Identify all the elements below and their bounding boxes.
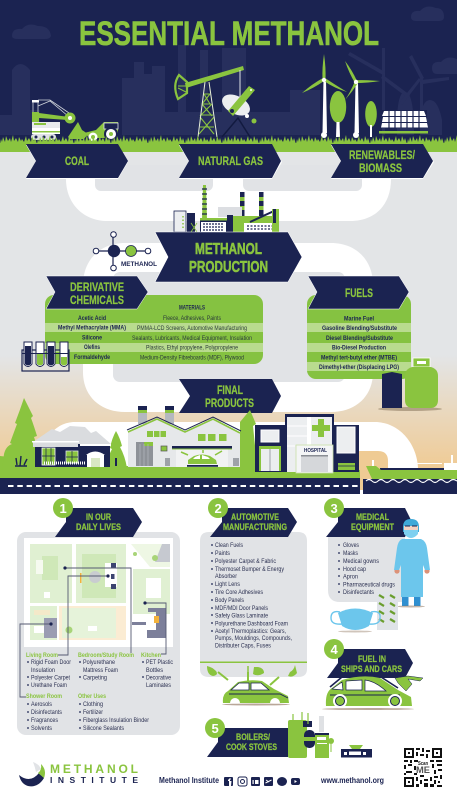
panel: automotive manufacturing: Light Lens <box>215 581 240 588</box>
icon: methanol molecule: METHANOL <box>121 261 157 268</box>
city and cloud silhouette <box>0 7 457 135</box>
panel: fuels: Bio-Diesel Production <box>332 346 386 352</box>
peach inner bend <box>358 451 388 490</box>
panel: fuels <box>307 295 411 379</box>
panel: automotive manufacturing: Safety Glass Laminate <box>215 612 268 620</box>
arrow: renewables/biomass: RENEWABLES/ <box>349 148 415 162</box>
arrow: renewables/biomass: BIOMASS <box>359 161 402 175</box>
icon: car with parts <box>207 665 297 708</box>
social icons <box>224 777 300 786</box>
heading 5: boilers and cook stoves: 5 <box>212 721 219 736</box>
icon: methanol molecule <box>93 232 157 271</box>
green ground <box>0 456 360 478</box>
list text: Insulation <box>31 667 55 674</box>
list text: Bottles <box>146 667 163 674</box>
panel: daily lives <box>17 532 180 735</box>
icon: test tubes <box>22 342 69 371</box>
icon: LPG gas tank <box>378 358 442 411</box>
QR code: ME <box>416 765 430 775</box>
arrow: natural gas <box>179 144 282 179</box>
list text: Aerosols <box>31 701 52 708</box>
panel: derivative chemicals: Fleece, Adhesives, Paints <box>163 316 221 322</box>
panel: automotive manufacturing: Tire Core Adhesives <box>215 589 263 596</box>
panel: derivative chemicals: Methyl Methacrylate (MMA) <box>58 326 126 332</box>
heading 4: fuel in ships and cars: SHIPS AND CARS <box>341 664 402 675</box>
panel: medical equipment: Hood cap <box>343 566 366 573</box>
heading 1: in our daily lives: IN OUR <box>86 512 111 523</box>
heading 3: medical equipment: EQUIPMENT <box>351 522 394 533</box>
panel: derivative chemicals <box>45 295 263 364</box>
list text: Solvents <box>31 725 52 732</box>
heading 1: in our daily lives <box>53 498 142 537</box>
panel: fuels: Methyl tert-butyl ether (MTBE) <box>321 356 397 362</box>
list text <box>26 652 174 732</box>
panel: automotive manufacturing: Pumps, Mouldings, Compounds, <box>215 635 292 642</box>
logo: methanol institute <box>19 762 138 786</box>
arrow: derivative chemicals: CHEMICALS <box>70 293 124 307</box>
arrow: final products <box>179 379 281 413</box>
icon: gas pump jack <box>175 66 256 137</box>
panel: automotive manufacturing: Polyester Carpet & Fabric <box>215 558 277 565</box>
panel: derivative chemicals: Plastics, Ethyl propylene, Polypropylene <box>146 346 239 352</box>
QR code <box>404 748 442 787</box>
icon: hospital <box>255 414 359 473</box>
heading 4: fuel in ships and cars: FUEL IN <box>358 654 386 665</box>
list text: Fragrances <box>31 717 58 724</box>
icon: medical worker in gown <box>394 519 430 608</box>
panel: derivative chemicals: MATERIALS <box>179 306 205 312</box>
arrow: derivative chemicals <box>46 276 148 309</box>
arrow: coal: COAL <box>65 154 89 168</box>
panel: automotive manufacturing: Paints <box>215 550 230 557</box>
panel: automotive manufacturing: Distributer Caps, Fuses <box>215 642 271 650</box>
arrow: final products: PRODUCTS <box>205 396 254 410</box>
arrow: final products: FINAL <box>217 383 243 397</box>
grass strip <box>0 134 457 152</box>
list text: Urethane Foam <box>31 682 67 689</box>
panel: automotive manufacturing: Body Panels <box>215 597 244 604</box>
icon: wind turbines, trees and solar panel <box>302 54 428 138</box>
list text: Other Uses <box>78 693 106 700</box>
arrow: methanol production: PRODUCTION <box>189 259 268 276</box>
panel: medical equipment: Medical gowns <box>343 558 379 565</box>
white flow pipes <box>40 179 418 490</box>
heading 2: automotive manufacturing: 2 <box>214 501 222 516</box>
heading 1: in our daily lives: 1 <box>60 501 67 516</box>
heading 3: medical equipment: MEDICAL <box>356 512 389 523</box>
icon: factory with car <box>127 406 241 467</box>
icon: cook stove <box>341 745 372 758</box>
list text: Silicone Sealants <box>83 725 124 732</box>
panel: automotive manufacturing: Polyurethane Dashboard Foam <box>215 620 288 628</box>
panel: medical equipment: Pharmaceutical drugs <box>343 582 395 588</box>
panel: fuels: Gasoline Blending/Substitute <box>322 326 398 332</box>
list text: Rigid Foam Door <box>31 659 72 666</box>
panel: medical equipment: Gloves <box>343 542 359 549</box>
list text: Fertilizer <box>83 709 104 716</box>
list text: Laminates <box>146 682 171 689</box>
floor plan <box>24 538 173 647</box>
panel: automotive manufacturing: Absorber <box>215 573 238 580</box>
icon: methanol factory <box>174 185 279 233</box>
heading 4: fuel in ships and cars <box>324 639 413 678</box>
list text: Living Room <box>26 652 58 659</box>
panel: automotive manufacturing: Clean Fuels <box>215 542 243 549</box>
panel: automotive manufacturing: MDF/MDI Door Panels <box>215 605 268 612</box>
list text: Kitchen <box>141 652 161 659</box>
website address: www.methanol.org <box>320 775 384 785</box>
arrow: methanol production: METHANOL <box>195 241 262 258</box>
icon: trees <box>2 398 256 470</box>
road <box>0 478 360 494</box>
arrow: derivative chemicals: DERIVATIVE <box>70 280 124 294</box>
panel: derivative chemicals: Silicone <box>82 336 103 342</box>
list text: Polyester Carpet <box>31 674 70 682</box>
heading 2: automotive manufacturing <box>208 498 297 537</box>
list text: Disinfectants <box>31 709 62 716</box>
callout lines <box>20 568 166 697</box>
arrow: methanol production <box>155 232 302 282</box>
panel: medical equipment: Masks <box>343 550 358 557</box>
panel: derivative chemicals: Sealants, Lubricants, Medical Equipment, Insulation <box>132 336 252 342</box>
inner grey pipe blocks <box>95 165 362 382</box>
arrow: renewables/biomass <box>331 144 434 179</box>
list text: Decorative <box>146 674 171 682</box>
heading 2: automotive manufacturing: AUTOMOTIVE <box>231 512 279 523</box>
heading 4: fuel in ships and cars: 4 <box>330 642 338 657</box>
heading 3: medical equipment: 3 <box>330 501 338 516</box>
panel: derivative chemicals: Olefins <box>84 345 101 351</box>
icon: coal excavator and tractor <box>31 100 118 142</box>
panel: derivative chemicals: Medium-Density Fibreboards (MDF), Plywood <box>140 356 244 362</box>
panel: medical equipment: Apron <box>343 574 358 580</box>
icon: house <box>15 426 117 467</box>
panel: automotive manufacturing <box>200 532 307 677</box>
heading 2: automotive manufacturing: MANUFACTURING <box>223 522 287 533</box>
arrow: fuels <box>308 276 409 309</box>
icon: boiler <box>288 712 334 758</box>
panel: automotive manufacturing: Thermoset Bumper & Energy <box>215 566 285 573</box>
icon: hospital: HOSPITAL <box>304 448 328 454</box>
heading 1: in our daily lives: DAILY LIVES <box>76 522 121 533</box>
icon: surgical mask <box>331 608 380 632</box>
panel: medical equipment: Disinfectants <box>343 589 374 596</box>
logo: methanol institute: INSTITUTE <box>50 775 138 785</box>
heading 5: boilers and cook stoves <box>205 718 288 757</box>
top night sky band <box>0 0 457 145</box>
arrow: coal <box>26 144 128 179</box>
panel: fuels: Marine Fuel <box>344 316 374 322</box>
panel: medical equipment <box>328 537 405 602</box>
heading 5: boilers and cook stoves: COOK STOVES <box>226 742 277 753</box>
arrow: fuels: FUELS <box>345 286 373 300</box>
list text: Bedroom/Study Room <box>78 652 134 659</box>
arrow: natural gas: NATURAL GAS <box>198 154 263 168</box>
icon: car refuelling <box>322 675 423 710</box>
list text: Carpeting <box>83 674 107 682</box>
QR code: Scan <box>418 761 428 767</box>
list text: Fiberglass Insulation Binder <box>83 717 150 724</box>
list text: Shower Room <box>26 693 62 700</box>
heading 3: medical equipment <box>324 498 412 537</box>
footer name: Methanol Institute <box>159 775 219 785</box>
panel: fuels: Diesel Blending/Substitute <box>326 336 394 342</box>
icon: pill pack <box>377 592 398 630</box>
panel: derivative chemicals: PMMA-LCD Screens, Automotive Manufacturing <box>137 326 247 332</box>
list text: Clothing <box>83 701 103 708</box>
heading 5: boilers and cook stoves: BOILERS/ <box>236 732 270 743</box>
panel: automotive manufacturing: Acetyl Thermoplastics: Gears, <box>215 628 286 635</box>
panel: derivative chemicals: Formaldehyde <box>74 355 111 361</box>
panel: derivative chemicals: Acetic Acid <box>78 316 106 322</box>
icon: ship on water <box>363 455 457 494</box>
panel: fuels: Dimethyl-ether (Displacing LPG) <box>319 365 399 371</box>
list text: PET Plastic <box>146 659 174 666</box>
list text: Mattress Foam <box>83 667 118 674</box>
logo: methanol institute: METHANOL <box>50 762 138 776</box>
list text: Polyurethane <box>83 659 115 666</box>
